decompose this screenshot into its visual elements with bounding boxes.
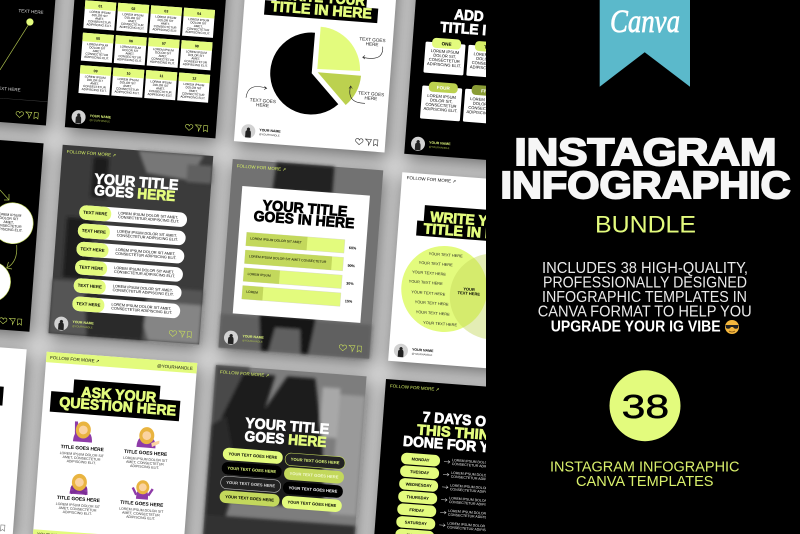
- card: numbered grid: AMET,: [125, 51, 135, 56]
- card: ask your question: TITLE GOES HERE: [120, 500, 164, 509]
- card: pill buttons on photo: YOUR TEXT GOES HERE: [287, 499, 337, 508]
- card: numbered grid: LOREM IPSUM: [150, 79, 172, 85]
- card: numbered grid: CONSECTETUR: [184, 59, 208, 65]
- card: numbered grid: 05: [96, 37, 100, 41]
- card: top-right black with boxes: LOREM IPSUM: [473, 51, 503, 58]
- description text block: INCLUDES 38 HIGH-QUALITY,: [542, 260, 748, 277]
- pie card body: HERE: [256, 102, 269, 108]
- card: title with pill rows on photo: @YOURHANDLE: [72, 324, 93, 329]
- card: numbered grid: 07: [162, 42, 166, 46]
- card: progress bars on photo: [218, 159, 385, 364]
- card: progress bars on photo: 90%: [347, 264, 356, 268]
- card: title with pill rows on photo: [48, 145, 215, 350]
- card: 7 days schedule: LOREM IPSUM DOLOR SIT AMET,: [450, 484, 506, 492]
- card: numbered grid: AMET,: [191, 56, 201, 61]
- description text block: [538, 260, 752, 336]
- card: numbered grid: AMET,: [161, 21, 170, 26]
- badge: 38 templates: 38: [622, 388, 669, 425]
- card: ask your question: ASK YOUR: [81, 385, 157, 406]
- card: 7 days schedule: CONSECTETUR ADIPISCING ELIT.: [452, 462, 509, 470]
- card: numbered grid: 01: [98, 4, 103, 9]
- card: 7 days schedule: DONE FOR YOU: [402, 434, 510, 458]
- card: numbered grid: DOLOR SIT: [89, 45, 106, 51]
- ribbon: Canva badge: Canva: [610, 4, 680, 40]
- card: numbered grid: 03: [164, 9, 168, 13]
- pie card body: TEXT GOES: [358, 90, 384, 97]
- card: numbered grid: LOREM IPSUM: [183, 82, 205, 87]
- heading: Instagram Infographic: [500, 132, 790, 207]
- card: venn diagram: FOLLOW FOR MORE ↗: [407, 175, 457, 184]
- card: 7 days schedule: LOREM IPSUM DOLOR SIT AMET,: [449, 496, 505, 504]
- card: top-left black: TEXT HERE: [18, 8, 44, 15]
- card: numbered grid: AMET,: [128, 19, 137, 24]
- card: numbered grid: CONSECTETUR: [118, 54, 142, 60]
- card: 7 days schedule: SATURDAY: [405, 520, 427, 526]
- card: pill buttons on photo: YOUR TEXT GOES HERE: [289, 471, 339, 480]
- card: top-right black with boxes: LOREM IPSUM: [470, 96, 500, 103]
- card: progress bars on photo: GOES IN HERE: [253, 209, 355, 232]
- card: 7 days schedule: TUESDAY: [410, 469, 430, 475]
- card: numbered grid: ADIPISCING ELIT.: [147, 92, 173, 98]
- card: numbered grid: ADIPISCING ELIT.: [114, 90, 140, 95]
- card: progress bars on photo: LOREM IPSUM: [247, 272, 271, 278]
- card: numbered grid: LOREM IPSUM: [117, 77, 139, 82]
- template cards collage: [0, 0, 571, 534]
- card: top-right black with boxes: CONSECTETUR: [471, 60, 503, 67]
- card: ask your question: AMET, CONSECTETUR: [122, 511, 161, 517]
- card: pill buttons on photo: FOLLOW FOR MORE ↗: [220, 369, 270, 378]
- card: progress bars on photo: 15%: [345, 299, 353, 304]
- card: title with pill rows on photo: TEXT HERE: [78, 283, 102, 289]
- card: top-right black with boxes: ADIPISCING ELIT.: [423, 106, 458, 113]
- card: title with pill rows on photo: LOREM IPSUM DOLOR SIT AMET,: [114, 266, 174, 275]
- card: title with pill rows on photo: CONSECTETUR ADIPISCING ELIT.: [118, 215, 179, 224]
- pie card body: TEXT GOES: [250, 97, 276, 104]
- card: venn diagram: YOUR NAME: [412, 348, 434, 353]
- description text block: INFOGRAPHIC TEMPLATES IN: [542, 289, 747, 306]
- card: venn diagram: YOUR TEXT HERE: [416, 309, 450, 317]
- card: top-right black with boxes: LOREM IPSUM: [427, 93, 457, 100]
- card: numbered grid: YOUR NAME: [90, 114, 112, 120]
- card: ask your question: TITLE GOES HERE: [124, 449, 168, 458]
- card: numbered grid: ADIPISCING ELIT.: [180, 94, 206, 100]
- pie arrows: [246, 47, 383, 103]
- card: venn diagram: YOUR TEXT HERE: [423, 320, 458, 327]
- card: numbered grid: DOLOR SIT: [185, 85, 202, 90]
- pie card body: TEXT GOES: [359, 36, 386, 43]
- caption: Instagram Infographic Canva Templates: INSTAGRAM INFOGRAPHIC: [550, 460, 740, 476]
- card: 7 days schedule: THIS THING: [416, 422, 501, 445]
- card: numbered grid: DOLOR SIT: [120, 80, 136, 85]
- card: numbered grid: CONSECTETUR: [149, 89, 173, 95]
- card: ask your question: FOLLOW FOR MORE ↗: [50, 355, 100, 364]
- card: numbered grid: DOLOR SIT: [157, 18, 174, 23]
- card: 7 days schedule: LOREM IPSUM DOLOR SIT AMET,: [447, 522, 503, 530]
- card: top-left black: [0, 0, 62, 131]
- card: progress bars on photo: LOREM IPSUM DOLOR SIT AMET: [250, 237, 302, 244]
- card: title with pill rows on photo: LOREM IPSUM DOLOR SIT AMET,: [111, 303, 172, 311]
- card: top-right black with boxes: FOUR: [437, 85, 451, 91]
- card: ask your question: LOREM IPSUM DOLOR SIT: [56, 502, 101, 509]
- card: venn diagram: WRITE YOUR: [430, 210, 519, 232]
- card: pill buttons on photo: [201, 365, 369, 534]
- card: ask your question: [32, 352, 199, 534]
- card: numbered grid: ADIPISCING ELIT.: [152, 27, 178, 33]
- card: title with pill rows on photo: CONSECTETUR ADIPISCING ELIT.: [115, 252, 177, 260]
- pie card body: HERE: [366, 41, 379, 47]
- card: numbered grid: CONSECTETUR: [88, 19, 112, 25]
- card: 7 days schedule: CONSECTETUR ADIPISCING ELIT.: [451, 475, 508, 483]
- card: top-right black with boxes: ADD YOUR: [454, 7, 527, 29]
- card: top-right black with boxes: FIVE: [481, 88, 491, 94]
- card: top-right black with boxes: CONSECTETUR: [468, 105, 500, 112]
- card: numbered grid: ADIPISCING ELIT.: [117, 57, 142, 63]
- card: numbered grid: AMET,: [189, 89, 198, 93]
- heading: Instagram Infographic: INFOGRAPHIC: [500, 165, 790, 207]
- card: 7 days schedule: THURSDAY: [406, 494, 429, 501]
- card: ask your question: AMET, CONSECTETUR: [126, 460, 164, 467]
- card: pill buttons on photo: YOUR TEXT GOES HERE: [228, 451, 278, 460]
- card: top-right black with boxes: @YOURHANDLE: [429, 145, 450, 150]
- card: numbered grid: CONSECTETUR: [154, 24, 177, 30]
- card: ask your question: TITLE GOES HERE: [60, 444, 105, 453]
- card: numbered grid: DOLOR SIT: [155, 50, 172, 56]
- card: top-right black with boxes: DOLOR SIT,: [430, 97, 453, 104]
- card: venn diagram: YOUR: [463, 286, 475, 292]
- flow arrows: [0, 190, 17, 269]
- card: numbered grid: ADIPISCING ELIT.: [86, 22, 112, 28]
- card: numbered grid: DOLOR SIT: [124, 15, 141, 21]
- card: title with pill rows on photo: TEXT HERE: [83, 210, 108, 216]
- card: 7 days schedule: CONSECTETUR ADIPISCING ELIT.: [449, 500, 506, 508]
- card: venn diagram: @YOURHANDLE: [412, 352, 433, 357]
- card: flow circles black: [0, 132, 46, 337]
- card: numbered grid: LOREM IPSUM: [153, 47, 175, 53]
- badge: 38 templates: [610, 370, 680, 441]
- card: numbered grid: DOLOR SIT: [92, 13, 108, 18]
- card: venn diagram: [388, 172, 555, 377]
- card: venn diagram: YOUR TEXT HERE: [415, 299, 449, 307]
- card: ask your question: LOREM IPSUM DOLOR SIT: [123, 456, 168, 463]
- card: numbered grid: AMET,: [123, 84, 132, 88]
- flow card body: [0, 132, 46, 337]
- card: ask your question: AMET, CONSECTETUR: [62, 455, 101, 462]
- card: progress bars on photo: 60%: [349, 246, 357, 251]
- card: numbered grid: AMET,: [156, 86, 165, 91]
- card: title with pill rows on photo: GOES HERE: [94, 183, 176, 205]
- card: top-right black with boxes: TITLE IN HERE: [440, 20, 539, 43]
- card: 7 days schedule: [371, 379, 539, 534]
- card: venn diagram: TEXT HERE: [457, 290, 481, 297]
- card: numbered grid: ADIPISCING ELIT.: [185, 30, 211, 36]
- card: top-right black with boxes: ONE: [441, 41, 452, 47]
- card: numbered grid: LOREM IPSUM: [155, 15, 177, 20]
- card: top-right black with boxes: DOLOR SIT,: [433, 53, 456, 59]
- card: progress bars on photo: LOREM IPSUM DOLOR SIT AMET CONSECTETUR: [249, 254, 327, 264]
- card: ask your question: LOREM IPSUM DOLOR SIT: [60, 451, 105, 458]
- card: ask your question: QUESTION HERE: [59, 395, 177, 420]
- card: top-right black with boxes: TWO: [484, 44, 495, 50]
- card: 7 days schedule: WEDNESDAY: [405, 481, 432, 488]
- card: numbered grid: CONSECTETUR: [116, 86, 140, 92]
- card: title with pill rows on photo: YOUR TITLE: [94, 172, 179, 194]
- pie card body: @YOURHANDLE: [259, 132, 280, 138]
- card: progress bars on photo: YOUR NAME: [242, 334, 265, 340]
- card: venn diagram: YOUR TEXT HERE: [411, 289, 446, 297]
- card: top-right black with boxes: CONSECTETUR: [429, 57, 460, 64]
- heading: Instagram Infographic: INSTAGRAM: [514, 132, 776, 174]
- card: pill buttons on photo: YOUR TEXT GOES HERE: [227, 465, 277, 474]
- card: numbered grid: DOLOR SIT: [190, 20, 207, 26]
- icon: sunglasses emoji: [725, 320, 739, 334]
- card: title with pill rows on photo: TEXT HERE: [76, 301, 101, 308]
- caption: Instagram Infographic Canva Templates: [550, 460, 740, 490]
- subheading: bundle: BUNDLE: [595, 212, 696, 238]
- card: numbered grid: 08: [195, 44, 199, 48]
- card: top-right black with boxes: ADIPISCING ELIT.: [427, 61, 461, 68]
- card: ask your question: ADIPISCING ELIT.: [130, 464, 160, 470]
- card: top-right black with boxes: YOUR NAME: [429, 141, 451, 146]
- card: title with pill rows on photo: CONSECTETUR ADIPISCING ELIT.: [112, 288, 174, 297]
- card: ask your question: ADIPISCING ELIT.: [67, 459, 96, 465]
- card: ask your question: TITLE GOES HERE: [57, 495, 101, 504]
- card: progress bars on photo: YOUR TITLE: [262, 198, 348, 220]
- card: top-right black with boxes: DOLOR SIT,: [476, 56, 499, 62]
- card: venn diagram: YOUR TEXT HERE: [409, 278, 443, 286]
- card: numbered grid: 12: [192, 76, 196, 81]
- pie chart: [270, 27, 361, 115]
- card: numbered grid: CONSECTETUR: [182, 91, 206, 97]
- card: numbered grid: CONSECTETUR: [186, 27, 210, 32]
- card: ask your question: ADIPISCING ELIT.: [126, 515, 156, 521]
- pie card body: YOUR NAME: [259, 128, 281, 134]
- card: numbered grid: DOLOR SIT: [153, 83, 169, 88]
- card: numbered grid: 11: [159, 74, 163, 78]
- card: title with pill rows on photo: LOREM IPSUM DOLOR SIT AMET,: [117, 230, 177, 238]
- ribbon: Canva badge: [600, 0, 690, 87]
- card: 7 days schedule: FRIDAY: [409, 507, 425, 513]
- card: numbered grid: AMET,: [93, 49, 102, 54]
- card: 7 days schedule: LOREM IPSUM DOLOR SIT AMET,: [451, 471, 507, 479]
- card: venn diagram: YOUR TEXT HERE: [412, 269, 447, 277]
- card: title with pill rows on photo: LOREM IPSUM DOLOR SIT AMET,: [113, 284, 173, 293]
- card: numbered grid: 02: [131, 7, 136, 11]
- card: numbered grid: ADIPISCING ELIT.: [183, 62, 208, 68]
- card: venn diagram: TITLE IN HERE: [423, 221, 525, 245]
- card: numbered grid: AMET,: [95, 16, 104, 21]
- card: numbered grid: CONSECTETUR: [83, 84, 107, 90]
- card: title with pill rows on photo: LOREM IPSUM DOLOR SIT AMET,: [115, 248, 176, 256]
- card: 7 days schedule: LOREM IPSUM DOLOR SIT AMET,: [448, 509, 504, 517]
- card: numbered grid: ADIPISCING ELIT.: [150, 60, 175, 65]
- card: top-right black with boxes: ADIPISCING ELIT.: [466, 109, 501, 117]
- card: numbered grid: @YOURHANDLE: [89, 118, 110, 123]
- card: numbered grid: 04: [197, 12, 201, 16]
- card: title with pill rows on photo: CONSECTETUR ADIPISCING ELIT.: [111, 306, 173, 315]
- card: numbered grid: LOREM IPSUM: [186, 49, 207, 55]
- card: ask your question: ADIPISCING ELIT.: [63, 510, 92, 516]
- card: numbered grid: LOREM IPSUM: [188, 17, 210, 23]
- card: title with pill rows on photo: LOREM IPSUM DOLOR SIT AMET,: [118, 211, 178, 220]
- card: pie chart: [234, 0, 401, 158]
- card: 7 days schedule: 7 DAYS OF: [422, 410, 495, 431]
- card: numbered grid: CONSECTETUR: [121, 22, 145, 27]
- card: numbered grid: 09: [93, 69, 98, 73]
- pie card body: [234, 0, 401, 158]
- card: venn diagram: YOUR TEXT HERE: [419, 260, 453, 267]
- card: 7 days schedule: LOREM IPSUM DOLOR SIT AMET,: [452, 458, 508, 466]
- card: bottom-left white: [0, 338, 29, 534]
- card: numbered grid: 10: [126, 72, 131, 76]
- card: pill buttons on photo: YOUR TEXT GOES HERE: [291, 457, 340, 465]
- card: ask your question: LOREM IPSUM DOLOR SIT: [119, 507, 164, 514]
- card: title with pill rows on photo: YOUR NAME: [72, 320, 95, 326]
- card: numbered grid: DOLOR SIT: [122, 48, 139, 53]
- description text block: PROFESSIONALLY DESIGNED: [543, 275, 747, 292]
- card: numbered grid: LOREM IPSUM: [122, 12, 144, 18]
- card: progress bars on photo: LOREM: [246, 290, 258, 295]
- card: 7 days schedule: MONDAY: [411, 456, 430, 463]
- card: title with pill rows on photo: CONSECTETUR ADIPISCING ELIT.: [114, 270, 175, 278]
- card: numbered grid: DOLOR SIT: [188, 53, 204, 58]
- card: pill buttons on photo: YOUR TEXT GOES HERE: [226, 480, 276, 488]
- card: 7 days schedule: CONSECTETUR ADIPISCING ELIT.: [450, 487, 507, 496]
- card: title with pill rows on photo: CONSECTETUR ADIPISCING ELIT.: [117, 233, 178, 242]
- card: top-right black with boxes: [404, 0, 571, 170]
- card: numbered grid: ADIPISCING ELIT.: [82, 87, 107, 93]
- card: top-right black with boxes: LOREM IPSUM: [431, 48, 460, 55]
- card: pill buttons on photo: YOUR TITLE: [245, 416, 330, 438]
- card: numbered grid: AMET,: [158, 54, 168, 58]
- panel: right black info panel: [486, 0, 800, 534]
- card: numbered grid: ADIPISCING ELIT.: [119, 25, 145, 31]
- card: numbered grid: AMET,: [90, 81, 99, 86]
- card: top-right black with boxes: CONSECTETUR: [425, 102, 457, 109]
- card: title with pill rows on photo: TEXT HERE: [80, 246, 105, 253]
- card: numbered grid: LOREM IPSUM: [85, 74, 106, 80]
- card: 7 days schedule: FOLLOW FOR MORE ↗: [390, 383, 440, 392]
- card: numbered grid: AMET,: [194, 24, 203, 29]
- card: numbered grid: [64, 0, 232, 144]
- card: pill buttons on photo: YOUR TEXT GOES HERE: [225, 494, 274, 503]
- card: progress bars on photo: 30%: [346, 281, 354, 286]
- card: title with pill rows on photo: TEXT HERE: [82, 228, 106, 235]
- card: progress bars on photo: FOLLOW FOR MORE ↗: [237, 163, 286, 172]
- card: pill buttons on photo: GOES HERE: [244, 429, 327, 451]
- card: top-right black with boxes: DOLOR SIT,: [473, 101, 496, 107]
- card: numbered grid: CONSECTETUR: [151, 56, 175, 62]
- card: 7 days schedule: CONSECTETUR ADIPISCING ELIT.: [448, 513, 505, 521]
- card: progress bars on photo: @YOURHANDLE: [242, 338, 263, 344]
- card: ask your question: AMET, CONSECTETUR: [59, 506, 97, 513]
- card: pill buttons on photo: YOUR TEXT GOES HERE: [288, 485, 338, 494]
- caption: Instagram Infographic Canva Templates: CANVA TEMPLATES: [576, 474, 714, 490]
- card: numbered grid: 06: [129, 39, 133, 43]
- card: numbered grid: LOREM IPSUM: [120, 44, 142, 50]
- pie card body: HERE: [364, 95, 377, 101]
- card: venn diagram: YOUR TEXT HERE: [429, 251, 463, 258]
- card: numbered grid: LOREM IPSUM: [87, 42, 109, 48]
- card: numbered grid: CONSECTETUR: [85, 52, 109, 57]
- card: title with pill rows on photo: FOLLOW FOR MORE ↗: [67, 149, 116, 158]
- card: top-right black with boxes: ADIPISCING ELIT.: [470, 64, 504, 72]
- flow card body: AMET,: [3, 220, 14, 225]
- description text block: UPGRADE YOUR IG VIBE: [551, 319, 721, 336]
- card: numbered grid: ADIPISCING ELIT.: [84, 55, 109, 61]
- card: title with pill rows on photo: TEXT HERE: [79, 264, 103, 271]
- card: ask your question: @YOURHANDLE: [157, 363, 193, 371]
- card: numbered grid: LOREM IPSUM: [89, 10, 111, 15]
- description text block: CANVA FORMAT TO HELP YOU: [538, 304, 752, 321]
- card: 7 days schedule: CONSECTETUR ADIPISCING ELIT.: [447, 525, 504, 534]
- card: numbered grid: DOLOR SIT: [87, 78, 103, 83]
